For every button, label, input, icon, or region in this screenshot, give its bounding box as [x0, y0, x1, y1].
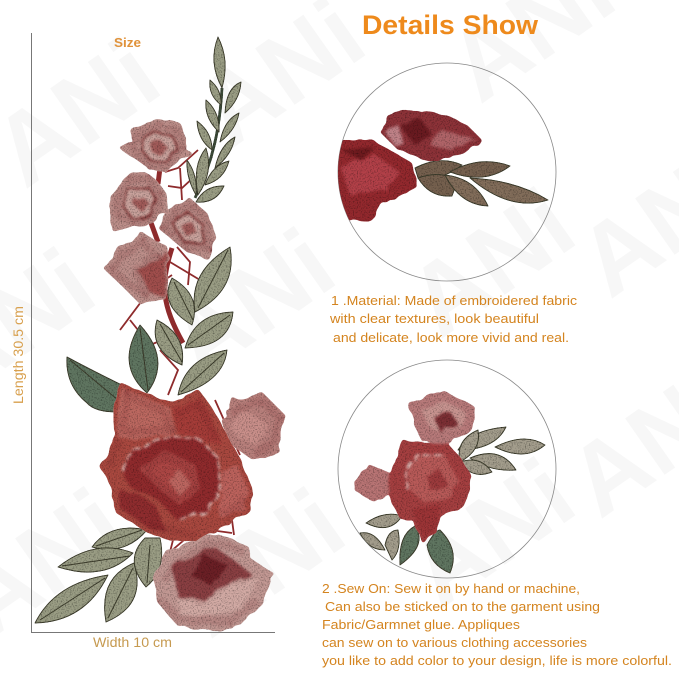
watermark pattern: ANi — [148, 207, 354, 398]
dimension axes — [32, 33, 275, 632]
sew on description: Can also be sticked on to the garment using — [325, 599, 600, 614]
material description: 1 .Material: Made of embroidered fabric — [331, 293, 578, 308]
size label: Size — [114, 35, 141, 50]
upper olive leaves — [155, 247, 233, 395]
material description — [329, 293, 578, 345]
sew on description: Fabric/Garmnet glue. Appliques — [322, 617, 521, 632]
sew on description — [322, 581, 672, 668]
watermark pattern: ANi — [158, 467, 364, 658]
big rose — [100, 383, 252, 542]
sew on description: can sew on to various clothing accessories — [322, 635, 588, 650]
sew on description: you like to add color to your design, life is more colorful. — [322, 653, 672, 668]
sew on description: 2 .Sew On: Sew it on by hand or machine, — [322, 581, 580, 596]
side flower — [221, 393, 285, 460]
detail circle 1 — [333, 63, 556, 281]
close-up of rose and leaves — [333, 110, 548, 222]
embroidered flower applique, full size — [35, 37, 285, 629]
watermark pattern: ANi — [388, 437, 594, 628]
branch with small leaves — [187, 37, 241, 202]
bottom flower — [153, 533, 274, 629]
left leaves — [67, 325, 158, 412]
title: Details Show — [362, 10, 539, 40]
bottom olive leaves — [35, 528, 162, 623]
material description: with clear textures, look beautiful — [329, 311, 539, 326]
pink flowers — [105, 119, 215, 304]
material description: and delicate, look more vivid and real. — [333, 330, 569, 345]
close-up of complete applique — [354, 390, 545, 573]
detail circle 2 — [338, 360, 556, 578]
length label: Length 30.5 cm — [11, 306, 26, 404]
width label: Width 10 cm — [93, 635, 172, 650]
lace net and stems — [120, 150, 240, 552]
watermark pattern: ANi — [388, 167, 594, 358]
